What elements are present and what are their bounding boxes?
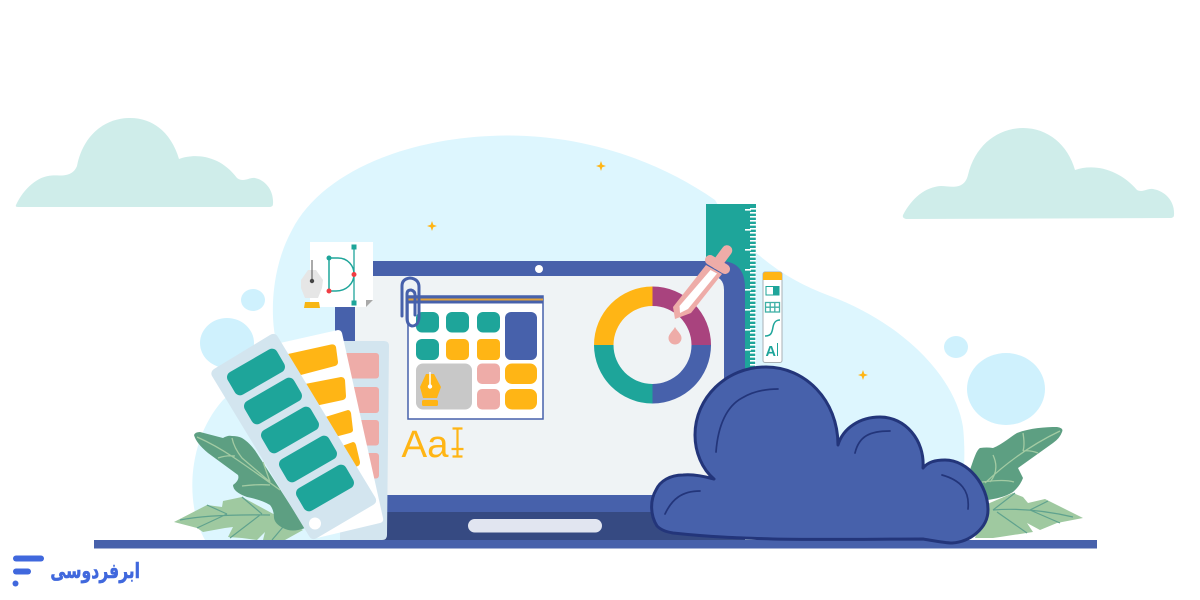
swatch fan middle card bbox=[280, 330, 383, 538]
logo wordmark: ابرفردوسی bbox=[50, 560, 140, 584]
ruler bbox=[706, 204, 756, 375]
typography sample: Aa bbox=[402, 424, 449, 466]
calendar panel bbox=[408, 296, 543, 419]
laptop bbox=[335, 261, 745, 541]
logo mark bbox=[12, 556, 44, 586]
toolbar bbox=[763, 272, 782, 362]
left leaves bbox=[174, 432, 305, 540]
pen tool card bbox=[301, 242, 373, 308]
swatch fan back card bbox=[340, 341, 389, 540]
swatch fan front card bbox=[211, 334, 376, 539]
logo bbox=[12, 556, 140, 586]
light blue background blob bbox=[192, 136, 964, 540]
paper clip bbox=[402, 278, 419, 326]
decorative bubbles bbox=[200, 289, 1045, 425]
large blue cloud bbox=[652, 367, 988, 543]
background cloud right bbox=[903, 128, 1174, 219]
sparkles bbox=[427, 161, 868, 380]
ground bar bbox=[94, 540, 1097, 548]
toolbar: A bbox=[766, 343, 776, 360]
right leaves bbox=[970, 427, 1083, 538]
background cloud left bbox=[16, 118, 273, 207]
donut chart bbox=[594, 286, 711, 404]
color dropper bbox=[668, 250, 727, 345]
